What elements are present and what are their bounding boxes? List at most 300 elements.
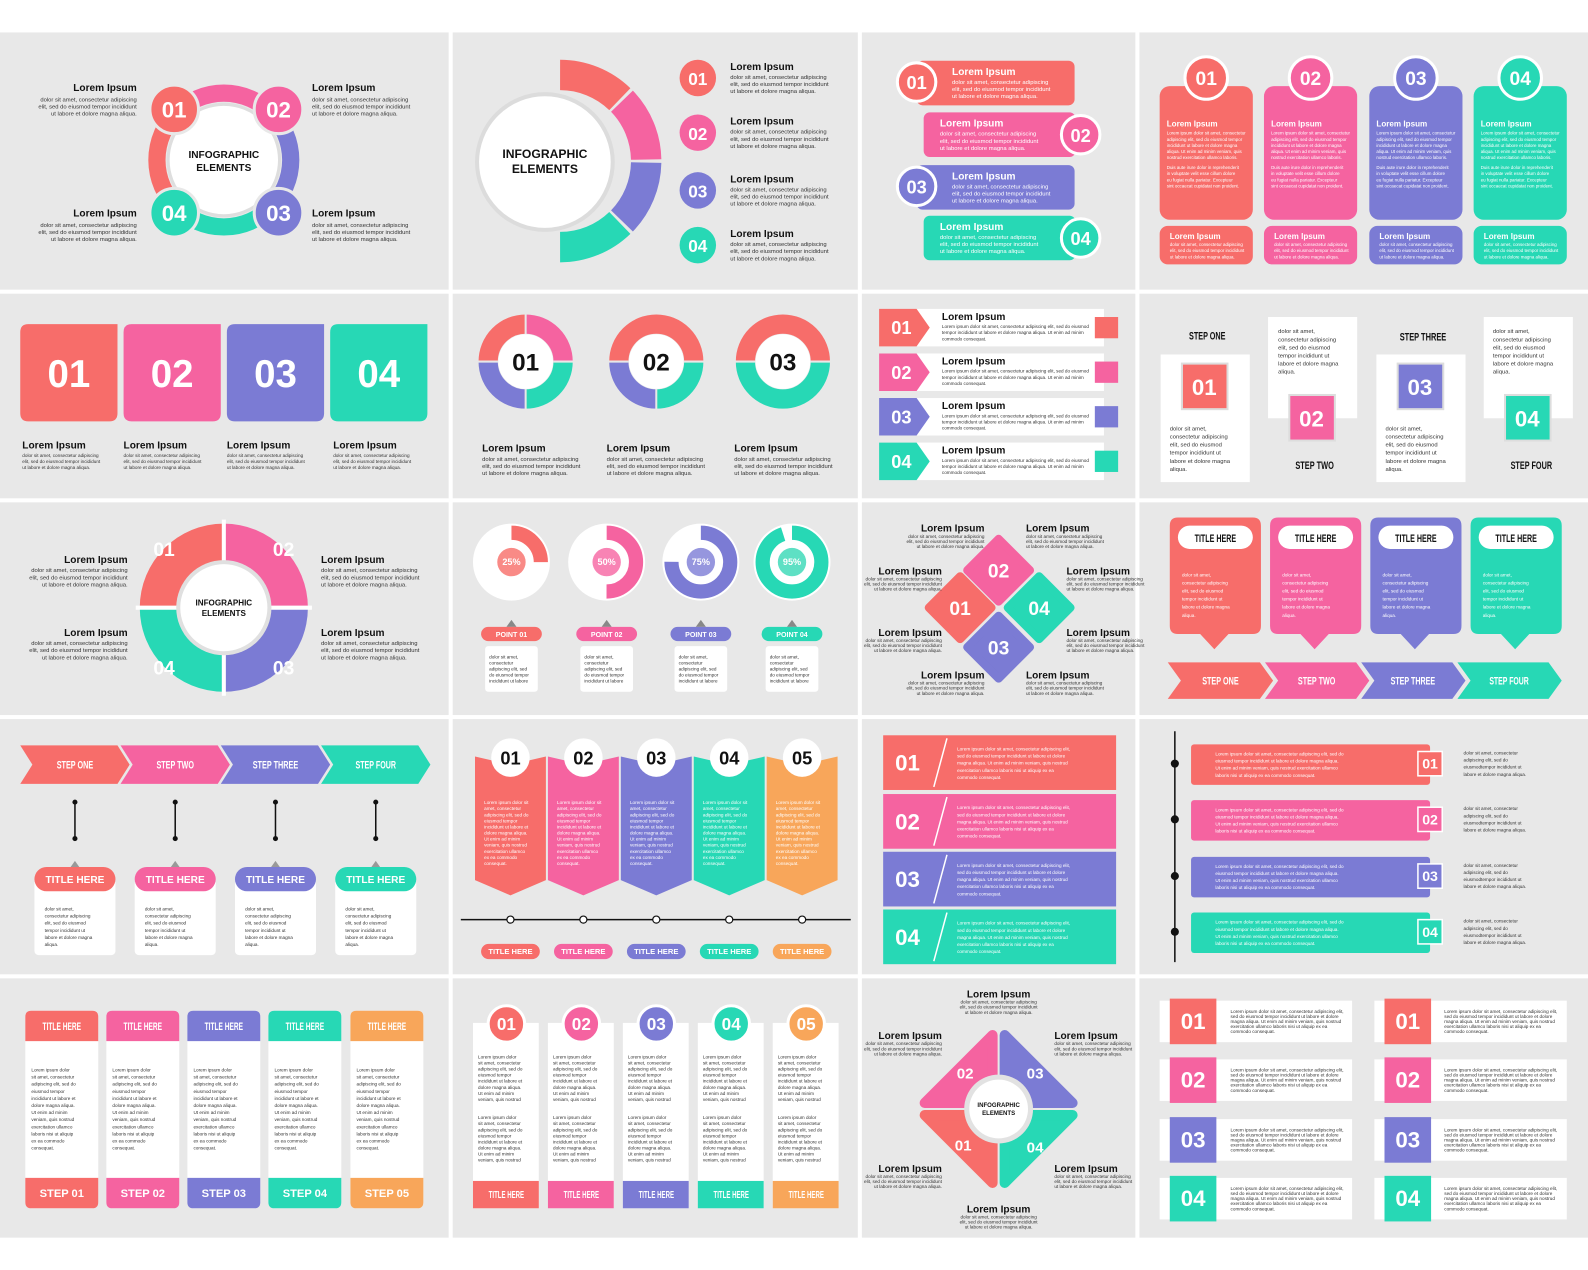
panel: callout cards with step arrows: tempor incididunt ut: [1182, 597, 1223, 602]
panel: five numbered columns: 05: [797, 1014, 816, 1034]
panel: percentage donuts: dolor sit amet,: [770, 654, 799, 659]
panel: five step columns: incididunt ut labore et: [112, 1096, 157, 1101]
panel: quarter pie: ELEMENTS: [202, 609, 246, 618]
panel: percentage donuts: 25%: [502, 557, 521, 567]
panel: diamond cluster: [864, 524, 1145, 696]
panel: callout cards with step arrows: elit, sed do eiusmod: [1282, 588, 1324, 593]
panel: two number lists: magna aliqua. Ut enim ad minim veniam, quis nostrud: [1231, 1137, 1342, 1142]
panel: arrow tag list: 02: [891, 362, 912, 383]
panel: percentage donuts: dolor sit amet,: [584, 654, 614, 659]
panel: four tall cards: eu fugiat nulla pariatur. Excepteur: [1167, 177, 1233, 182]
panel: staggered steps: consectetur adipiscing: [1278, 337, 1336, 343]
panel: banners with circles: dolor sit amet, consectetur adipiscing: [940, 235, 1036, 241]
panel: two number lists: magna aliqua. Ut enim ad minim veniam, quis nostrud: [1231, 1019, 1342, 1024]
panel: four tall cards: Lorem Ipsum: [1271, 120, 1322, 129]
panel: step chevrons with title cards: aliqua.: [245, 942, 259, 947]
panel: three donuts: elit, sed do eiusmod tempor incididunt: [482, 464, 581, 470]
panel: five numbered columns: incididunt ut labore et: [553, 1079, 598, 1084]
panel: five ribbon banners timeline: incididunt ut labore et: [703, 824, 748, 829]
panel: five numbered columns: adipiscing elit, sed do: [478, 1067, 523, 1072]
panel: five step columns: exercitation ullamco: [274, 1124, 316, 1129]
panel: two number lists: commodo consequat.: [1444, 1029, 1489, 1034]
step arrows: [1168, 662, 1562, 699]
panel: four tall cards: dolor sit amet, consectetur adipiscing: [1274, 242, 1348, 247]
panel: five numbered columns: eiusmod tempor: [553, 1133, 587, 1138]
panel: five numbered columns: eiusmod tempor: [778, 1073, 812, 1078]
panel: diamond cluster: Lorem Ipsum: [878, 628, 942, 639]
panel: percentage donuts: do eiusmod tempor: [770, 673, 810, 678]
panel: four tall cards: eu fugiat nulla pariatur. Excepteur: [1376, 177, 1443, 182]
list items: ut labore et dolore magna aliqua.: [730, 89, 816, 95]
panel: five ribbon banners timeline: Lorem ipsum dolor sit: [776, 800, 821, 805]
panel: big number tiles: ut labore et dolore magna aliqua.: [124, 465, 191, 470]
panel: five numbered columns: incididunt ut labore et: [703, 1079, 748, 1084]
panel: five step columns: ex ea commodo: [357, 1138, 390, 1143]
panel: five numbered columns: Lorem ipsum dolor: [703, 1054, 742, 1059]
panel: five step columns: eiusmod tempor: [31, 1089, 65, 1094]
panel: five step columns: eiusmod tempor: [112, 1089, 146, 1094]
panel: percentage donuts: POINT 04: [776, 631, 808, 639]
panel: four tall cards: dolor sit amet, consectetur adipiscing: [1170, 242, 1243, 247]
panel: banners with circles: elit, sed do eiusmod tempor incididunt: [940, 139, 1039, 145]
panel: step chevrons with title cards: STEP TWO: [156, 760, 194, 772]
panel: percentage donuts: do eiusmod tempor: [584, 673, 625, 678]
panel: slanted bars: 03: [895, 867, 920, 892]
panel: quarter pie: ut labore et dolore magna aliqua.: [321, 582, 407, 588]
panel: five numbered columns: dolore magna aliqua.: [778, 1085, 821, 1090]
panel: two number lists: commodo consequat.: [1231, 1148, 1275, 1153]
panel: diamond flower: 04: [1027, 1140, 1044, 1157]
panel: diamond cluster: 01: [949, 599, 971, 620]
panel: banners with circles: elit, sed do eiusmod tempor incididunt: [952, 191, 1051, 197]
panel: staggered steps: [1161, 317, 1573, 482]
panel: five step columns: adipiscing elit, sed do: [112, 1082, 157, 1087]
panel: quarter pie: [29, 520, 420, 696]
panel: five numbered columns: sit amet, consectetur: [703, 1121, 746, 1126]
panel: percentage donuts: dolor sit amet,: [489, 654, 518, 659]
step arrows: STEP FOUR: [1489, 676, 1529, 688]
panel: five numbered columns: 04: [722, 1014, 741, 1034]
panel: four tall cards: sint occaecat cupidatat non proident.: [1167, 183, 1239, 188]
panel: five numbered columns: Ut enim ad minim: [703, 1091, 739, 1096]
panel: four tall cards: incididunt ut labore et dolore magna: [1167, 143, 1238, 148]
panel: three donuts: ut labore et dolore magna aliqua.: [607, 471, 693, 477]
panel: diamond cluster: dolor sit amet, consectetur adipiscing: [908, 681, 985, 686]
panel: vertical timeline bars: labore et dolore magna aliqua.: [1463, 772, 1526, 777]
panel: callout cards with step arrows: aliqua.: [1282, 613, 1296, 618]
panel: five ribbon banners timeline: consequat.: [703, 861, 726, 866]
panel: percentage donuts: incididunt ut labore: [679, 679, 718, 684]
panel: quarter pie: dolor sit amet, consectetur adipiscing: [321, 641, 417, 647]
panel: five step columns: Lorem ipsum dolor: [193, 1068, 232, 1073]
panel: staggered steps: STEP TWO: [1295, 460, 1334, 472]
panel: five numbered columns: veniam, quis nostrud: [778, 1158, 821, 1163]
panel: five numbered columns: sit amet, consectetur: [778, 1121, 821, 1126]
panel: percentage donuts: POINT 01: [496, 631, 527, 639]
panel: big number tiles: elit, sed do eiusmod tempor incididunt: [227, 459, 305, 464]
panel: three donuts: ut labore et dolore magna aliqua.: [734, 471, 820, 477]
panel: diamond cluster: elit, sed do eiusmod tempor incididunt: [907, 686, 985, 691]
panel: staggered steps: dolor sit amet,: [1278, 329, 1315, 335]
panel: five ribbon banners timeline: eiusmod tempor: [484, 818, 518, 823]
panel: five numbered columns: dolore magna aliqua.: [553, 1085, 596, 1090]
panel: diamond flower: dolor sit amet, consectetur adipiscing: [866, 1041, 942, 1046]
panel: five numbered columns: veniam, quis nostrud: [628, 1158, 671, 1163]
panel: step chevrons with title cards: labore et dolore magna: [245, 935, 293, 940]
panel: two number lists: sed do eiusmod tempor incididunt ut labore et dolore: [1231, 1073, 1339, 1078]
list items: [680, 60, 829, 263]
panel: diamond cluster: elit, sed do eiusmod tempor incididunt: [1026, 686, 1105, 691]
panel: callout cards with step arrows: elit, sed do eiusmod: [1382, 588, 1424, 593]
panel: percentage donuts: 75%: [692, 557, 710, 567]
panel: quarter pie: elit, sed do eiusmod tempor incididunt: [29, 575, 128, 581]
list items: elit, sed do eiusmod tempor incididunt: [730, 137, 829, 143]
panel: quarter pie: ut labore et dolore magna aliqua.: [42, 655, 128, 661]
panel: five ribbon banners timeline: ex ea commodo: [484, 855, 518, 860]
panel: four tall cards: Duis aute irure dolor in reprehenderit: [1376, 165, 1449, 170]
panel: vertical timeline bars: adipiscing elit, sed do: [1463, 813, 1508, 818]
panel: five numbered columns: adipiscing elit, sed do: [553, 1127, 598, 1132]
panel: five ribbon banners timeline: 02: [573, 748, 594, 769]
panel: diamond flower: Lorem Ipsum: [967, 1204, 1030, 1215]
panel: vertical timeline bars: laboris nisi ut aliquip ex ea commodo consequat.: [1215, 773, 1315, 778]
panel: staggered steps: STEP ONE: [1189, 330, 1225, 342]
panel: five step columns: STEP 04: [283, 1188, 328, 1200]
panel: diamond cluster: elit, sed do eiusmod tempor incididunt: [1026, 539, 1105, 544]
panel: callout cards with step arrows: labore et dolore magna: [1382, 605, 1431, 610]
panel: arrow tag list: Lorem Ipsum: [942, 446, 1005, 457]
panel: arrow tag list: tempor incididunt ut labore et dolore magna aliqua. Ut enim ad minim: [942, 464, 1084, 469]
panel: two number lists: 03: [1181, 1128, 1205, 1153]
panel: five numbered columns: veniam, quis nostrud: [553, 1158, 596, 1163]
list items: Lorem Ipsum: [730, 174, 794, 185]
panel: diamond cluster: Lorem Ipsum: [1066, 566, 1130, 577]
panel: five ribbon banners timeline: TITLE HERE: [780, 947, 824, 956]
panel: callout cards with step arrows: consectetur adipiscing: [1182, 580, 1228, 585]
panel: two number lists: exercitation ullamco laboris nisi ut aliquip ex ea: [1444, 1024, 1541, 1029]
panel: diamond cluster: elit, sed do eiusmod tempor incididunt: [864, 581, 943, 586]
panel: four tall cards: ut labore et dolore magna aliqua.: [1379, 254, 1444, 259]
panel: vertical timeline bars: dolor sit amet, consectetur: [1463, 863, 1518, 868]
list items: Lorem Ipsum: [730, 62, 794, 73]
panel: five numbered columns: TITLE HERE: [714, 1190, 749, 1201]
text blocks: elit, sed do eiusmod tempor incididunt: [312, 104, 411, 110]
panel: slanted bars: Lorem ipsum dolor sit amet, consectetur adipiscing elit,: [957, 921, 1070, 926]
panel: five numbered columns: veniam, quis nostrud: [478, 1097, 521, 1102]
step arrows: STEP TWO: [1298, 676, 1336, 688]
panel: step chevrons with title cards: dolor sit amet,: [345, 907, 375, 912]
panel: five numbered columns: Lorem ipsum dolor: [778, 1054, 817, 1059]
panel: five numbered columns: adipiscing elit, sed do: [478, 1127, 523, 1132]
panel: two number lists: sed do eiusmod tempor incididunt ut labore et dolore: [1231, 1014, 1339, 1019]
panel: big number tiles: 02: [151, 353, 194, 396]
panel: callout cards with step arrows: tempor incididunt ut: [1483, 597, 1524, 602]
panel: five step columns: Lorem ipsum dolor: [112, 1068, 151, 1073]
panel: vertical timeline bars: eiusmodtempor incididunt ut: [1463, 933, 1522, 938]
panel: five numbered columns: eiusmod tempor: [703, 1073, 737, 1078]
panel: five step columns: Ut enim ad minim: [193, 1110, 230, 1115]
panel: five numbered columns: incididunt ut labore et: [778, 1079, 823, 1084]
panel: arrow tag list: commodo consequat.: [942, 381, 986, 386]
panel: slanted bars: Lorem ipsum dolor sit amet, consectetur adipiscing elit,: [957, 746, 1070, 751]
panel: circular ring 4 steps: [38, 83, 411, 243]
panel: percentage donuts: consectetur: [489, 660, 514, 665]
panel: banners with circles: ut labore et dolore magna aliqua.: [952, 94, 1038, 100]
panel: five numbered columns: dolore magna aliqua.: [703, 1146, 746, 1151]
panel: banners with circles: 04: [1071, 228, 1092, 249]
panel: percentage donuts: 95%: [783, 557, 801, 567]
panel: two number lists: commodo consequat.: [1231, 1029, 1275, 1034]
panel: five numbered columns: Ut enim ad minim: [553, 1152, 589, 1157]
panel: five numbered columns: sit amet, consectetur: [628, 1121, 671, 1126]
panel: four tall cards: nostrud exercitation ullamco laboris.: [1167, 155, 1238, 160]
panel: banners with circles: ut labore et dolore magna aliqua.: [940, 249, 1026, 255]
panel: diamond flower: dolor sit amet, consectetur adipiscing: [866, 1174, 942, 1179]
panel: five numbered columns: adipiscing elit, sed do: [628, 1127, 673, 1132]
panel: five step columns: consequat.: [193, 1146, 216, 1151]
panel: five ribbon banners timeline: adipiscing elit, sed do: [557, 812, 602, 817]
panel: banners with circles: ut labore et dolore magna aliqua.: [940, 146, 1026, 152]
panel: four tall cards: adipiscing elit, sed do eiusmod tempor: [1481, 137, 1557, 142]
panel: four tall cards: 04: [1510, 69, 1531, 90]
panel: vertical timeline bars: 02: [1422, 812, 1438, 828]
list items: Lorem Ipsum: [730, 229, 794, 240]
panel: five numbered columns: incididunt ut labore et: [703, 1139, 748, 1144]
panel: five ribbon banners timeline: Lorem ipsum dolor sit: [557, 800, 602, 805]
panel: five numbered columns: incididunt ut labore et: [553, 1139, 598, 1144]
text blocks: ut labore et dolore magna aliqua.: [51, 111, 137, 117]
panel: percentage donuts: consectetur: [679, 660, 703, 665]
panel: five step columns: sit amet, consectetur: [193, 1075, 237, 1080]
panel: two number lists: exercitation ullamco laboris nisi ut aliquip ex ea: [1231, 1083, 1328, 1088]
panel: five step columns: Ut enim ad minim: [274, 1110, 311, 1115]
panel: five ribbon banners timeline: Lorem ipsum dolor sit: [484, 800, 529, 805]
panel: staggered steps: 03: [1408, 375, 1432, 400]
text blocks: dolor sit amet, consectetur adipiscing: [312, 223, 408, 229]
panel: five step columns: eiusmod tempor: [357, 1089, 390, 1094]
panel: staggered steps: elit, sed do eiusmod: [1493, 345, 1545, 351]
panel: five step columns: incididunt ut labore et: [193, 1096, 238, 1101]
panel: five ribbon banners timeline: adipiscing elit, sed do: [776, 812, 821, 817]
panel: five numbered columns: eiusmod tempor: [628, 1133, 662, 1138]
panel: five step columns: adipiscing elit, sed do: [357, 1082, 401, 1087]
panel: five step columns: exercitation ullamco: [112, 1124, 154, 1129]
panel: five step columns: sit amet, consectetur: [357, 1075, 400, 1080]
panel: three donuts: Lorem Ipsum: [734, 444, 798, 455]
panel: diamond cluster: ut labore et dolore magna aliqua.: [874, 586, 942, 591]
panel: three donuts: 02: [643, 350, 670, 377]
panel: five numbered columns: 02: [572, 1014, 591, 1034]
panel: slanted bars: commodo consequat.: [957, 834, 1001, 839]
panel: staggered steps: tempor incididunt ut: [1386, 451, 1437, 457]
panel: banners with circles: 02: [1071, 125, 1091, 146]
panel: big number tiles: Lorem Ipsum: [227, 441, 290, 452]
panel: five numbered columns: incididunt ut labore et: [478, 1079, 523, 1084]
panel: percentage donuts: POINT 03: [685, 631, 717, 639]
panel: percentage donuts: do eiusmod tempor: [679, 673, 719, 678]
text blocks: Lorem Ipsum: [73, 83, 137, 94]
panel: step chevrons with title cards: STEP FOUR: [355, 760, 396, 772]
panel: four tall cards: aliqua. Ut enim ad minim veniam, quis: [1167, 149, 1243, 154]
panel: five numbered columns: veniam, quis nostrud: [703, 1158, 746, 1163]
panel: five numbered columns: Lorem ipsum dolor: [628, 1115, 667, 1120]
panel: four tall cards: elit, sed do eiusmod tempor incididunt: [1274, 248, 1349, 253]
panel: two number lists: Lorem ipsum dolor sit amet, consectetur adipiscing elit,: [1444, 1186, 1557, 1191]
panel: five step columns: STEP 02: [121, 1188, 165, 1200]
panel: five numbered columns: eiusmod tempor: [478, 1073, 512, 1078]
panel: five step columns: dolore magna aliqua.: [357, 1103, 400, 1108]
panel: slanted bars: exercitation ullamco laboris nisi ut aliquip ex ea: [957, 942, 1054, 947]
panel: percentage donuts: consectetur: [584, 660, 609, 665]
panel: step chevrons with title cards: TITLE HERE: [146, 875, 205, 886]
panel: two number lists: sed do eiusmod tempor incididunt ut labore et dolore: [1231, 1132, 1339, 1137]
panel: four tall cards: [1160, 57, 1567, 264]
panel: half ring list: INFOGRAPHIC: [502, 147, 588, 161]
panel: five numbered columns: Lorem ipsum dolor: [628, 1054, 667, 1059]
panel: diamond cluster: dolor sit amet, consectetur adipiscing: [1066, 576, 1143, 581]
panel: callout cards with step arrows: aliqua.: [1382, 613, 1396, 618]
panel: five step columns: Ut enim ad minim: [31, 1110, 68, 1115]
panel: five step columns: dolore magna aliqua.: [31, 1103, 75, 1108]
panel: five step columns: TITLE HERE: [205, 1021, 243, 1033]
panel: diamond flower: elit, sed do eiusmod tempor incididunt: [864, 1179, 943, 1184]
panel: five numbered columns: Ut enim ad minim: [703, 1152, 739, 1157]
panel: two number lists: exercitation ullamco laboris nisi ut aliquip ex ea: [1444, 1201, 1541, 1206]
panel: five ribbon banners timeline: veniam, quis nostrud: [776, 843, 819, 848]
panel: callout cards with step arrows: dolor sit amet,: [1483, 572, 1512, 577]
panel: big number tiles: dolor sit amet, consectetur adipiscing: [333, 453, 410, 458]
panel: slanted bars: magna aliqua. Ut enim ad minim veniam, quis nostrud: [957, 877, 1068, 882]
panel: big number tiles: elit, sed do eiusmod tempor incididunt: [333, 459, 412, 464]
panel: four tall cards: aliqua. Ut enim ad minim veniam, quis: [1481, 149, 1556, 154]
panel: two number lists: 01: [1181, 1009, 1205, 1034]
panel: five ribbon banners timeline: incididunt ut labore et: [630, 824, 675, 829]
text blocks: Lorem Ipsum: [312, 209, 375, 220]
panel: five ribbon banners timeline: exercitation ullamco: [630, 849, 671, 854]
panel: five numbered columns: eiusmod tempor: [703, 1133, 737, 1138]
panel: two number lists: sed do eiusmod tempor incididunt ut labore et dolore: [1444, 1014, 1553, 1019]
panel: four tall cards: adipiscing elit, sed do eiusmod tempor: [1167, 137, 1243, 142]
panel: diamond flower: 03: [1027, 1066, 1044, 1083]
panel: percentage donuts: [473, 524, 830, 692]
panel: five numbered columns: veniam, quis nostrud: [553, 1097, 596, 1102]
panel: two number lists: exercitation ullamco laboris nisi ut aliquip ex ea: [1231, 1142, 1328, 1147]
panel: five ribbon banners timeline: incididunt ut labore et: [776, 824, 821, 829]
panel: diamond flower: elit, sed do eiusmod tempor incididunt: [960, 1219, 1038, 1224]
panel: five ribbon banners timeline: dolore magna aliqua.: [630, 831, 673, 836]
panel: five ribbon banners timeline: exercitation ullamco: [557, 849, 598, 854]
panel: two number lists: commodo consequat.: [1444, 1088, 1489, 1093]
panel: slanted bars: magna aliqua. Ut enim ad minim veniam, quis nostrud: [957, 761, 1068, 766]
panel: four tall cards: in voluptate velit esse cillum dolore: [1376, 171, 1445, 176]
panel: quarter pie: Lorem Ipsum: [64, 555, 128, 566]
panel: vertical timeline bars: laboris nisi ut aliquip ex ea commodo consequat.: [1215, 829, 1315, 834]
panel: quarter pie: INFOGRAPHIC: [196, 599, 252, 608]
panel: four tall cards: Duis aute irure dolor in reprehenderit: [1271, 165, 1344, 170]
panel: staggered steps: aliqua.: [1278, 370, 1296, 376]
panel: diamond cluster: Lorem Ipsum: [1026, 671, 1089, 682]
text blocks: elit, sed do eiusmod tempor incididunt: [38, 230, 137, 236]
panel: five step columns: sit amet, consectetur: [31, 1075, 75, 1080]
panel: diamond flower: Lorem Ipsum: [967, 990, 1030, 1001]
panel: diamond flower: 02: [957, 1066, 974, 1083]
text blocks: dolor sit amet, consectetur adipiscing: [312, 97, 408, 103]
panel: arrow tag list: tempor incididunt ut labore et dolore magna aliqua. Ut enim ad minim: [942, 375, 1084, 380]
panel: arrow tag list: Lorem ipsum dolor sit amet, consectetur adipiscing elit, sed do eiusmod: [942, 369, 1089, 374]
panel: five ribbon banners timeline: [461, 738, 851, 959]
panel: staggered steps: elit, sed do eiusmod: [1278, 345, 1330, 351]
panel: circular ring 4 steps: 03: [266, 201, 291, 226]
panel: slanted bars: exercitation ullamco laboris nisi ut aliquip ex ea: [957, 884, 1054, 889]
panel: five step columns: Ut enim ad minim: [112, 1110, 149, 1115]
list items: ut labore et dolore magna aliqua.: [730, 144, 816, 150]
panel: diamond flower: dolor sit amet, consectetur adipiscing: [960, 1214, 1037, 1219]
panel: two number lists: [1160, 999, 1567, 1221]
panel: vertical timeline bars: 04: [1422, 925, 1438, 941]
panel: slanted bars: magna aliqua. Ut enim ad minim veniam, quis nostrud: [957, 935, 1068, 940]
panel: diamond flower: elit, sed do eiusmod tempor incididunt: [864, 1046, 943, 1051]
panel: vertical timeline bars: Lorem ipsum dolor sit amet, consectetur adipiscing elit, sed do: [1215, 807, 1344, 812]
panel: five numbered columns: incididunt ut labore et: [778, 1139, 823, 1144]
list items: ut labore et dolore magna aliqua.: [730, 202, 816, 208]
panel: arrow tag list: 04: [891, 451, 912, 472]
panel: quarter pie: ut labore et dolore magna aliqua.: [321, 655, 407, 661]
panel: diamond cluster: 04: [1028, 599, 1050, 620]
panel: big number tiles: elit, sed do eiusmod tempor incididunt: [124, 459, 202, 464]
panel: slanted bars: 02: [895, 809, 920, 834]
panel: two number lists: magna aliqua. Ut enim ad minim veniam, quis nostrud: [1231, 1078, 1342, 1083]
panel: diamond flower: INFOGRAPHIC: [977, 1103, 1020, 1109]
panel: five numbered columns: incididunt ut labore et: [628, 1139, 673, 1144]
panel: two number lists: 02: [1395, 1068, 1420, 1093]
panel: quarter pie: Lorem Ipsum: [64, 628, 128, 639]
panel: arrow tag list: Lorem ipsum dolor sit amet, consectetur adipiscing elit, sed do eiusmod: [942, 458, 1089, 463]
panel: diamond flower: ut labore et dolore magna aliqua.: [1054, 1051, 1122, 1056]
panel: diamond cluster: elit, sed do eiusmod tempor incididunt: [1066, 643, 1145, 648]
panel: five numbered columns: sit amet, consectetur: [778, 1060, 821, 1065]
panel: callout cards with step arrows: elit, sed do eiusmod: [1483, 588, 1524, 593]
panel: five ribbon banners timeline: consequat.: [484, 861, 507, 866]
panel: staggered steps: consectetur adipiscing: [1170, 435, 1228, 441]
panel: diamond flower: elit, sed do eiusmod tempor incididunt: [1054, 1046, 1133, 1051]
panel: five ribbon banners timeline: Ut enim ad minim: [776, 837, 812, 842]
panel: five ribbon banners timeline: veniam, quis nostrud: [557, 843, 600, 848]
panel: four tall cards: Lorem ipsum dolor sit amet, consectetur: [1271, 131, 1351, 136]
panel: five numbered columns: Lorem ipsum dolor: [553, 1115, 592, 1120]
panel: five numbered columns: dolore magna aliqua.: [478, 1085, 521, 1090]
panel: arrow tag list: tempor incididunt ut labore et dolore magna aliqua. Ut enim ad minim: [942, 330, 1084, 335]
panel: five ribbon banners timeline: ex ea commodo: [630, 855, 663, 860]
panel: diamond flower: 01: [955, 1138, 972, 1155]
panel: five numbered columns: TITLE HERE: [489, 1190, 524, 1201]
panel: arrow tag list: commodo consequat.: [942, 425, 986, 430]
panel: staggered steps: labore et dolore magna: [1386, 459, 1447, 465]
panel: four tall cards: Lorem Ipsum: [1379, 232, 1430, 241]
panel: step chevrons with title cards: consectetur adipiscing: [45, 914, 91, 919]
panel: five numbered columns: dolore magna aliqua.: [778, 1146, 821, 1151]
panel: five step columns: ex ea commodo: [112, 1138, 146, 1143]
panel: staggered steps: labore et dolore magna: [1170, 459, 1231, 465]
panel: four tall cards: incididunt ut labore et dolore magna: [1271, 143, 1342, 148]
text blocks: elit, sed do eiusmod tempor incididunt: [312, 230, 411, 236]
panel: staggered steps: 01: [1192, 375, 1217, 400]
panel: two number lists: sed do eiusmod tempor incididunt ut labore et dolore: [1444, 1073, 1553, 1078]
list items: dolor sit amet, consectetur adipiscing: [730, 242, 827, 248]
panel: callout cards with step arrows: labore et dolore magna: [1282, 605, 1330, 610]
panel: slanted bars: 01: [895, 751, 920, 776]
panel: vertical timeline bars: adipiscing elit, sed do: [1463, 926, 1508, 931]
panel: diamond flower: elit, sed do eiusmod tempor incididunt: [960, 1005, 1038, 1010]
